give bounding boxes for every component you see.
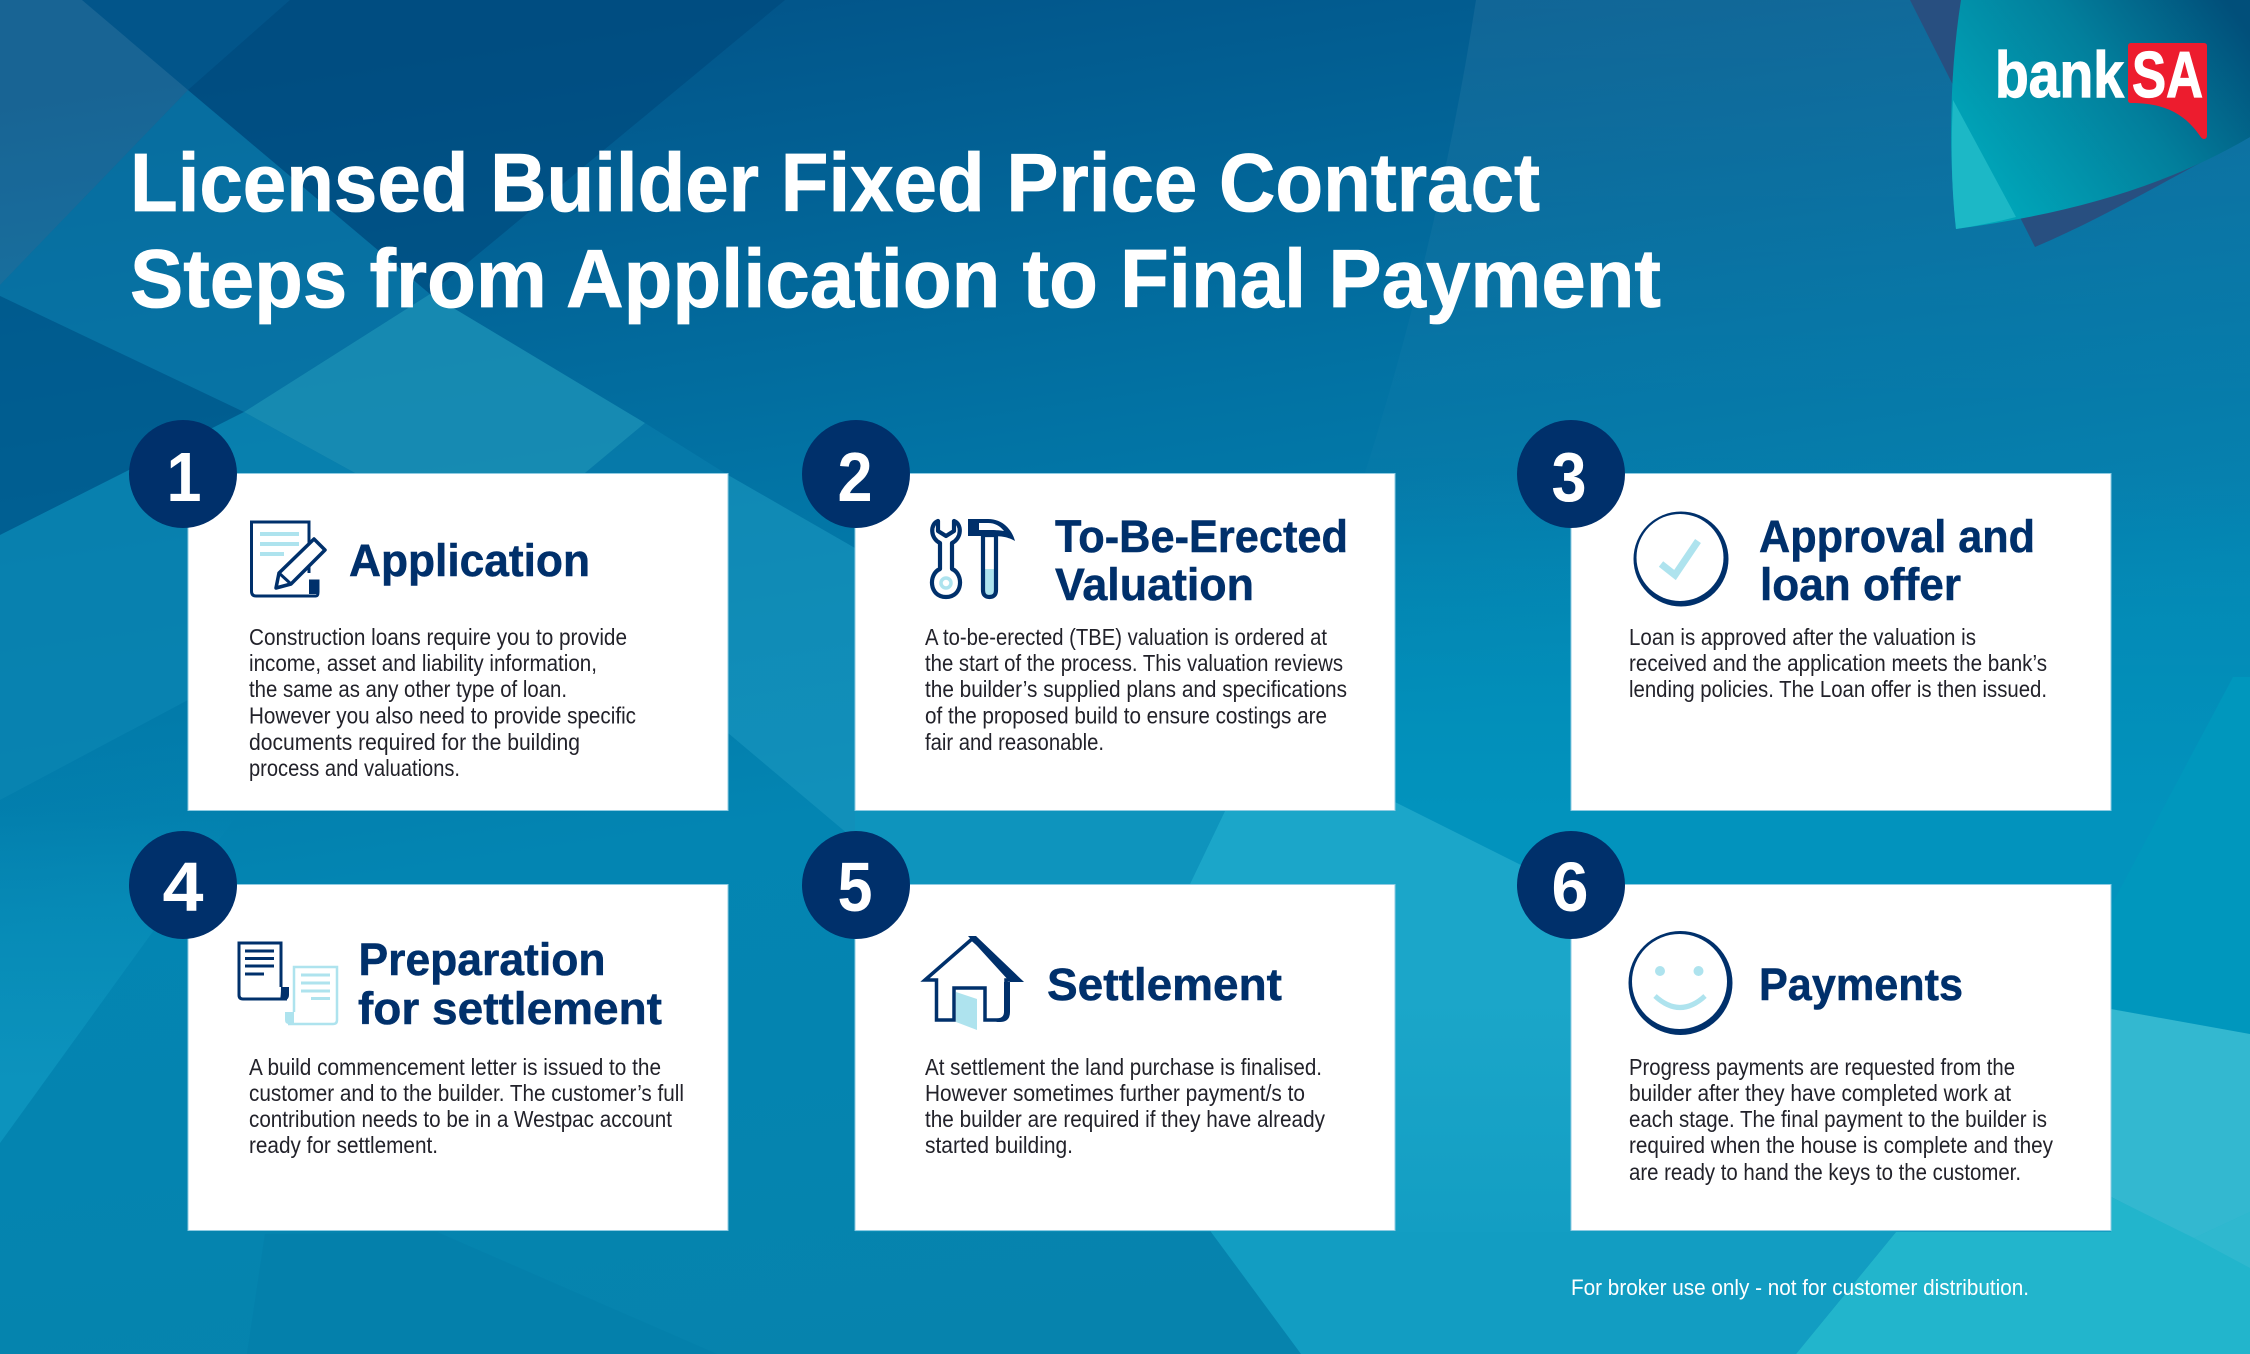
heading [1055,511,1348,610]
panel: step 2 to-be-erected valuation [802,420,1395,810]
body text: are ready to hand the keys to the customer. [1629,1159,2021,1185]
logo: bankSA: bank [1995,38,2125,111]
body text: process and valuations. [249,755,460,781]
body text: the builder are required if they have already [925,1106,1325,1132]
number badge 5 [802,831,910,939]
number badge 2: 2 [838,438,872,516]
body text: builder after they have completed work at [1629,1080,2011,1106]
logo: bankSA [1995,38,2207,139]
body text: customer and to the builder. The customer’s full [249,1080,684,1106]
panel: step 3 approval and loan offer [1517,420,2111,810]
icon: document and pencil [252,522,325,596]
body text: the same as any other type of loan. [249,676,567,702]
body text [925,1054,1325,1158]
number badge 3 [1517,420,1625,528]
number badge 4 [129,831,237,939]
title [130,136,1661,325]
number badge 2 [802,420,910,528]
body text: Construction loans require you to provide [249,624,627,650]
icon: two documents [239,943,337,1024]
body text: At settlement the land purchase is finalised. [925,1054,1322,1080]
body text: fair and reasonable. [925,729,1104,755]
body text: required when the house is complete and they [1629,1132,2053,1158]
panel: step 6 payments [1517,831,2111,1230]
body text: lending policies. The Loan offer is then issued. [1629,676,2047,702]
number badge 1 [129,420,237,528]
heading: Preparation [358,934,606,985]
body text: However sometimes further payment/s to [925,1080,1305,1106]
body text: received and the application meets the bank’s [1629,650,2047,676]
footer note: For broker use only - not for customer distribution. [1571,1275,2029,1300]
heading [1759,511,2035,610]
heading: Application [349,535,590,586]
heading: Approval and [1759,511,2035,562]
body text: each stage. The final payment to the builder is [1629,1106,2047,1132]
icon: house with open door [925,936,1024,1030]
number badge 4: 4 [162,848,204,926]
number badge 3: 3 [1552,438,1586,516]
body text: ready for settlement. [249,1132,438,1158]
body text: A to-be-erected (TBE) valuation is ordered at [925,624,1327,650]
icon: smiley face [1628,931,1732,1035]
body text: However you also need to provide specific [249,702,636,728]
body text [925,624,1347,755]
body text [1629,1054,2053,1185]
heading [358,934,662,1034]
body text: contribution needs to be in a Westpac account [249,1106,672,1132]
number badge 5: 5 [838,848,872,926]
heading: Payments [1759,959,1963,1010]
number badge 6 [1517,831,1625,939]
panel: step 4 preparation for settlement [129,831,728,1230]
heading: Valuation [1055,559,1254,610]
body text: of the proposed build to ensure costings are [925,702,1327,728]
heading: loan offer [1760,559,1961,610]
body text: the start of the process. This valuation reviews [925,650,1343,676]
heading: for settlement [358,983,662,1034]
corner graphic behind logo [1910,0,2250,247]
body text: documents required for the building [249,729,580,755]
body text: Progress payments are requested from the [1629,1054,2015,1080]
icon: wrench and hammer [932,519,1015,597]
panel: step 5 settlement [802,831,1395,1230]
title: Licensed Builder Fixed Price Contract [130,136,1540,229]
body text: income, asset and liability information, [249,650,597,676]
number badge 1: 1 [166,438,202,516]
body text [1629,624,2047,702]
body text: Loan is approved after the valuation is [1629,624,1976,650]
icon: check mark in circle [1634,512,1728,606]
title: Steps from Application to Final Payment [130,232,1661,325]
panel: step 1 application [129,420,728,810]
heading: To-Be-Erected [1055,511,1348,562]
body text: started building. [925,1132,1073,1158]
number badge 6: 6 [1552,848,1588,926]
body text: the builder’s supplied plans and specifications [925,676,1347,702]
body text [249,1054,684,1158]
body text [249,624,636,781]
heading: Settlement [1047,959,1282,1010]
body text: A build commencement letter is issued to the [249,1054,661,1080]
logo: bankSA: SA [2132,38,2203,111]
